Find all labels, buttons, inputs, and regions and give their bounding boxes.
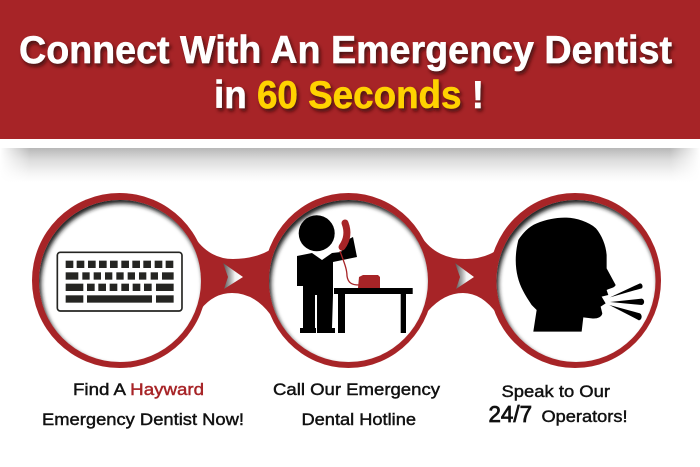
title [19, 29, 672, 117]
icon: speaking head [516, 218, 644, 332]
text block: step 3 caption: 24/7 [488, 401, 532, 427]
text block: step 1 caption [42, 380, 244, 429]
panel: circle 2 inner [269, 200, 428, 362]
header banner [0, 0, 700, 139]
icon: keyboard [57, 252, 182, 311]
title: in 60 Seconds ! [214, 74, 484, 117]
text block: step 3 caption [488, 382, 628, 427]
panel: circle 3 inner [496, 200, 656, 362]
banner shadow band [0, 148, 700, 182]
arrow: step 1 to 2 [223, 263, 243, 289]
connected red circle frame [32, 193, 661, 368]
text block: step 2 caption [273, 380, 441, 429]
icon: person on telephone at desk [297, 215, 413, 333]
text block: step 1 caption: Emergency Dentist Now! [42, 410, 244, 429]
arrow: step 2 to 3 [455, 263, 474, 289]
text block: step 2 caption: Dental Hotline [302, 410, 416, 429]
text block: step 2 caption: Call Our Emergency [273, 380, 441, 399]
text block: step 3 caption: Operators! [542, 407, 628, 426]
text block: step 3 caption: Speak to Our [502, 382, 610, 401]
text block: step 1 caption: Find A Hayward [73, 380, 204, 399]
title: Connect With An Emergency Dentist [19, 29, 672, 72]
panel: circle 1 inner [39, 200, 201, 362]
